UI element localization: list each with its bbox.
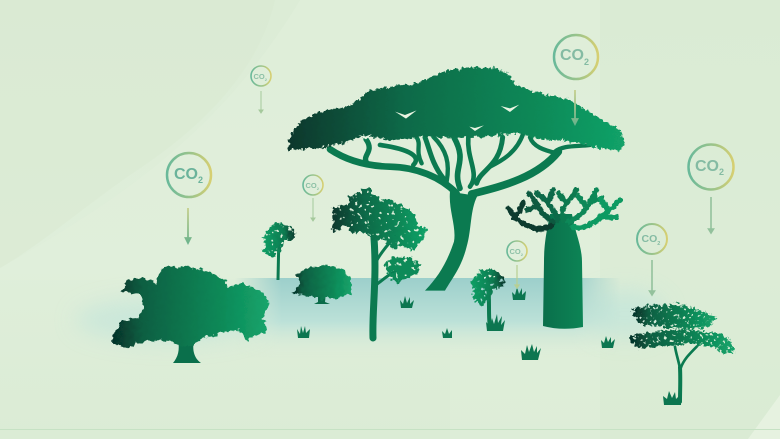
- CO2 marker small center: CO: [510, 247, 521, 256]
- CO2 marker small top: [251, 66, 271, 113]
- grass tufts: [297, 287, 681, 405]
- grass tuft: [400, 296, 414, 308]
- mid pine lower canopy: [384, 257, 420, 284]
- small oak canopy: [292, 265, 353, 299]
- CO2 marker large right: [688, 144, 734, 233]
- teal ground pool: [80, 278, 660, 344]
- small oak tree: [292, 265, 353, 304]
- CO2 marker medium right: [637, 224, 667, 295]
- grass tuft: [297, 326, 310, 338]
- mid pine trunk: [373, 235, 402, 338]
- grass tuft: [663, 391, 681, 405]
- CO2 marker medium right: 2: [657, 241, 660, 247]
- CO2 marker small mid: 2: [317, 186, 320, 191]
- arrow: [311, 198, 315, 221]
- CO2 marker large top: 2: [584, 57, 589, 67]
- small mid tree canopy: [471, 268, 505, 305]
- arrow: [515, 265, 519, 288]
- flat-top canopy lower: [630, 330, 735, 353]
- CO2 marker small center: 2: [521, 252, 524, 257]
- CO2 marker large right: CO: [695, 158, 719, 175]
- CO2 marker small top: 2: [265, 77, 268, 82]
- arrow: [259, 91, 263, 113]
- small mid tree trunk: [488, 285, 490, 328]
- grass tuft: [601, 336, 615, 348]
- flat-top canopy upper: [633, 304, 717, 330]
- CO2 marker large right: 2: [719, 167, 724, 177]
- small pine canopy: [262, 222, 296, 256]
- flat-top trunk: [675, 347, 697, 402]
- CO2 marker small mid: CO: [306, 181, 317, 190]
- arrow: [186, 208, 190, 243]
- small pine tree: [262, 222, 296, 280]
- arrow: [650, 260, 654, 295]
- mid pine tree: [332, 188, 426, 338]
- CO2 marker small top: CO: [254, 72, 265, 81]
- small pine trunk: [278, 232, 279, 280]
- birds: [358, 105, 519, 139]
- oak trunk: [173, 340, 201, 363]
- baobab branches: [508, 190, 620, 229]
- CO2 marker small mid: [303, 175, 323, 221]
- flat-top tree: [630, 304, 735, 402]
- acacia trunk and branches: [330, 133, 590, 291]
- CO2 marker large left: [167, 153, 211, 243]
- grass tuft: [512, 287, 526, 300]
- arrow: [708, 197, 714, 233]
- arrow: [572, 90, 578, 124]
- large oak tree: [111, 266, 270, 363]
- mid pine canopy: [332, 188, 426, 250]
- CO2 marker medium right: CO: [642, 233, 657, 245]
- grass tuft: [442, 328, 452, 338]
- CO2 marker large top: CO: [560, 47, 584, 64]
- CO2 marker large left: 2: [198, 175, 203, 185]
- acacia canopy: [288, 67, 625, 151]
- oak canopy: [111, 266, 270, 348]
- CO2 marker large left: CO: [174, 166, 198, 183]
- small oak trunk: [314, 292, 330, 304]
- CO2 marker small center: [507, 241, 527, 288]
- CO2 marker large top: [554, 35, 598, 124]
- grass tuft: [521, 344, 541, 360]
- baobab trunk: [543, 214, 583, 329]
- baobab tree: [508, 190, 620, 329]
- large acacia tree: [288, 67, 625, 291]
- small mid tree: [471, 268, 505, 328]
- grass tuft: [486, 314, 505, 331]
